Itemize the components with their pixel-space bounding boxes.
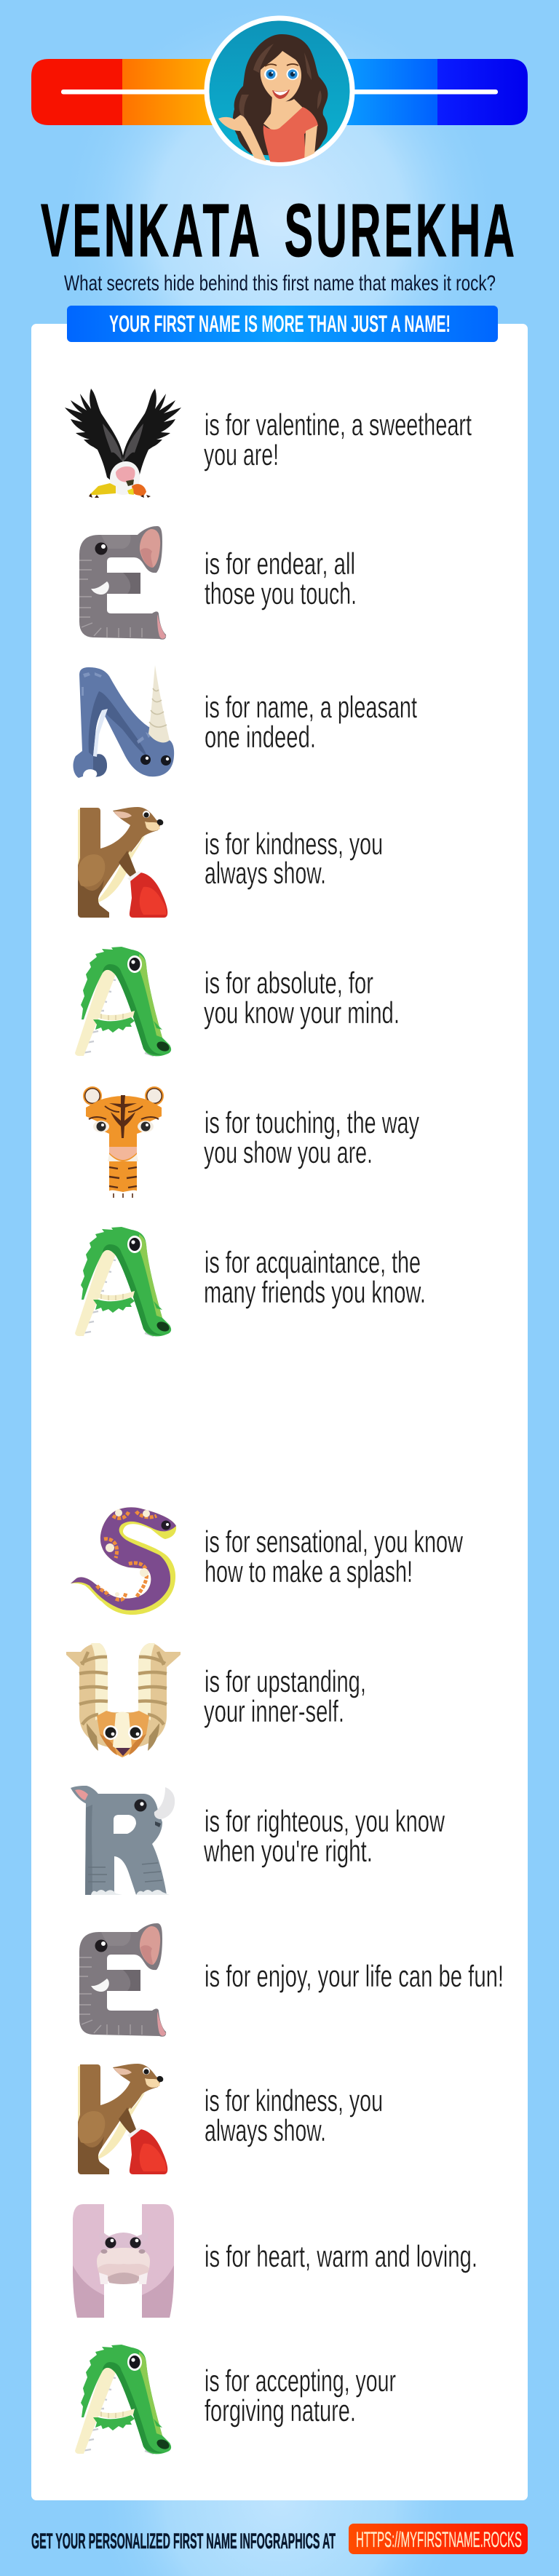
text: U: your inner-self. (204, 1694, 344, 1728)
text: A (205, 2364, 396, 2428)
row: A crocodile (75, 947, 400, 1056)
icon: vulture letter V (65, 389, 181, 498)
text: R: is for righteous, you know (205, 1804, 445, 1838)
text: E (205, 546, 357, 611)
banner (67, 306, 498, 342)
row: E elephant (79, 526, 357, 640)
avatar: woman in circle (207, 18, 352, 164)
icon: crocodile letter A (75, 1227, 171, 1336)
text: R: when you're right. (203, 1834, 373, 1868)
text: K: is for kindness, you (205, 827, 383, 861)
text: K (205, 2083, 383, 2147)
text: A: you know your mind. (204, 995, 400, 1030)
row: A crocodile third (75, 2345, 396, 2454)
icon: hippo letter H (73, 2204, 174, 2318)
text: E: those you touch. (205, 576, 357, 611)
icon: elephant letter E (79, 1923, 166, 2037)
icon: crocodile letter A (75, 2345, 171, 2454)
text: A (204, 1245, 426, 1309)
row: N narwhal (74, 665, 417, 779)
text: K: is for kindness, you (205, 2083, 383, 2118)
text: A: is for absolute, for (205, 966, 373, 1000)
text: A: forgiving nature. (205, 2393, 356, 2428)
row: U armadillo (66, 1643, 366, 1757)
icon: elephant letter E (79, 526, 166, 640)
text: K: always show. (205, 856, 326, 890)
row: H hippo (73, 2204, 477, 2318)
row: T tiger (83, 1086, 419, 1198)
text: S (205, 1524, 463, 1589)
icon: crocodile letter A (75, 947, 171, 1056)
text: V: you are! (204, 437, 279, 472)
row: V vulture (65, 389, 472, 498)
row: S snake (71, 1507, 463, 1615)
text: U: is for upstanding, (205, 1664, 366, 1698)
header bar (31, 59, 528, 125)
icon: snake letter S (71, 1507, 176, 1615)
text: E: is for endear, all (205, 546, 355, 581)
text: N: is for name, a pleasant (205, 690, 417, 724)
icon: armadillo letter U (66, 1643, 181, 1757)
text: A: is for accepting, your (205, 2364, 396, 2398)
text: A (204, 966, 400, 1030)
icon: narwhal letter N (74, 665, 174, 779)
text: T (204, 1105, 419, 1169)
text: V (204, 408, 472, 472)
row: R rhino (71, 1786, 445, 1895)
text: A: many friends you know. (204, 1275, 426, 1309)
icon: kangaroo letter K (78, 807, 167, 918)
text: R (203, 1804, 445, 1868)
text: A: is for acquaintance, the (205, 1245, 421, 1279)
icon: kangaroo letter K (78, 2064, 167, 2174)
text: K (205, 827, 383, 890)
text: N: one indeed. (205, 720, 316, 754)
text: K: always show. (205, 2113, 326, 2147)
text: N (205, 690, 417, 754)
text: T: you show you are. (204, 1135, 373, 1169)
icon: tiger letter T (83, 1086, 164, 1198)
panel: letters card (31, 324, 528, 2500)
text: U (204, 1664, 366, 1728)
text: T: is for touching, the way (205, 1105, 419, 1140)
row: A crocodile second (75, 1227, 426, 1336)
row: K kangaroo (78, 807, 383, 918)
footer link button (349, 2524, 528, 2554)
icon: rhino letter R (71, 1786, 175, 1895)
row: E elephant second (79, 1923, 504, 2037)
text: S: how to make a splash! (205, 1554, 413, 1589)
row: K kangaroo second (78, 2064, 383, 2174)
